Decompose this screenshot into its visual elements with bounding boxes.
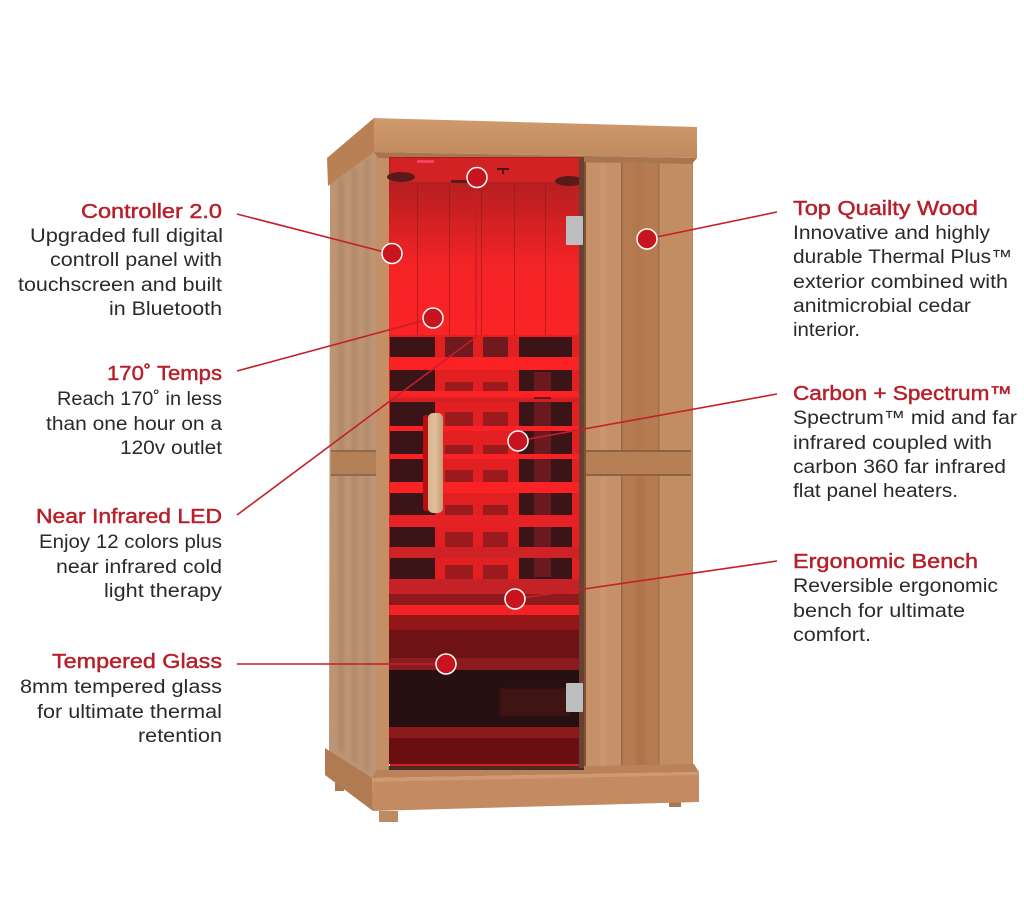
text block: Ergonomic Bench: Ergonomic Bench (793, 551, 978, 573)
text block: Carbon + Spectrum: Carbon + Spectrum™ (793, 383, 1012, 405)
text block: Tempered Glass: Tempered Glass (52, 651, 222, 673)
sauna cabin (325, 118, 699, 822)
text block: Controller 2.0: touchscreen and built (18, 275, 223, 296)
text block: Top Quailty Wood: anitmicrobial cedar (793, 296, 972, 317)
front foot (379, 811, 398, 822)
text block: 170 Temps (46, 363, 223, 459)
text block: Controller 2.0: controll panel with (50, 250, 222, 271)
text block: Top Quailty Wood: Innovative and highly (793, 223, 991, 244)
text block: 170 Temps: 170˚ Temps (107, 363, 222, 385)
callout lines (237, 187, 777, 664)
text block: Controller 2.0 (18, 201, 223, 320)
text block: Carbon + Spectrum: flat panel heaters. (793, 481, 958, 502)
bottom hinge (566, 683, 583, 712)
text block: Ergonomic Bench: comfort. (793, 625, 871, 646)
text block: Tempered Glass: retention (138, 726, 222, 747)
roof (327, 118, 697, 186)
text block: Near Infrared LED: Near Infrared LED (36, 506, 222, 528)
dark blocks (390, 337, 572, 579)
door handle (423, 413, 443, 513)
back feet (335, 783, 681, 807)
text block: Controller 2.0: Upgraded full digital (30, 226, 223, 247)
text block: Top Quailty Wood: exterior combined with (793, 272, 1008, 293)
text block: Ergonomic Bench: Reversible ergonomic (793, 576, 998, 597)
ceiling (387, 158, 583, 186)
text block: Ergonomic Bench (793, 551, 998, 646)
glass door interior (387, 157, 584, 770)
text block: Near Infrared LED: near infrared cold (56, 557, 222, 578)
bench and lower section (389, 594, 584, 770)
text block: 170 Temps: 120v outlet (120, 438, 223, 459)
text block: Ergonomic Bench: bench for ultimate (793, 601, 965, 622)
lower bench area (389, 335, 580, 617)
text block: Controller 2.0: in Bluetooth (109, 299, 222, 320)
base plinth (325, 748, 699, 811)
left side panel (329, 150, 376, 782)
text block: Tempered Glass: for ultimate thermal (37, 702, 222, 723)
text block: Near Infrared LED: light therapy (104, 581, 223, 602)
text block: 170 Temps: than one hour on a (46, 414, 222, 435)
text block: Carbon + Spectrum: carbon 360 far infrared (793, 457, 1006, 478)
text block: Carbon + Spectrum (793, 383, 1018, 502)
top hinge (566, 216, 583, 245)
text block: Top Quailty Wood: durable Thermal Plus™ (793, 247, 1012, 268)
centre blocks (445, 337, 508, 579)
text block: Carbon + Spectrum: infrared coupled with (793, 433, 992, 454)
text block: Carbon + Spectrum: Spectrum™ mid and far (793, 408, 1018, 429)
front left post (376, 155, 389, 777)
red back wall (389, 157, 584, 335)
text block: Controller 2.0: Controller 2.0 (81, 201, 222, 223)
text block: Near Infrared LED: Enjoy 12 colors plus (39, 532, 222, 553)
horizontal slats (390, 357, 579, 615)
text block: Top Quailty Wood: interior. (793, 320, 860, 341)
text block: 170 Temps: Reach 170˚ in less (57, 389, 222, 410)
text block: Top Quailty Wood (793, 198, 1012, 341)
text block: Tempered Glass: 8mm tempered glass (20, 677, 222, 698)
text block: Near Infrared LED (36, 506, 223, 602)
text block: Top Quailty Wood: Top Quailty Wood (793, 198, 978, 220)
right wood panel (584, 160, 693, 768)
callout dots (382, 168, 657, 674)
text block: Tempered Glass (20, 651, 222, 747)
